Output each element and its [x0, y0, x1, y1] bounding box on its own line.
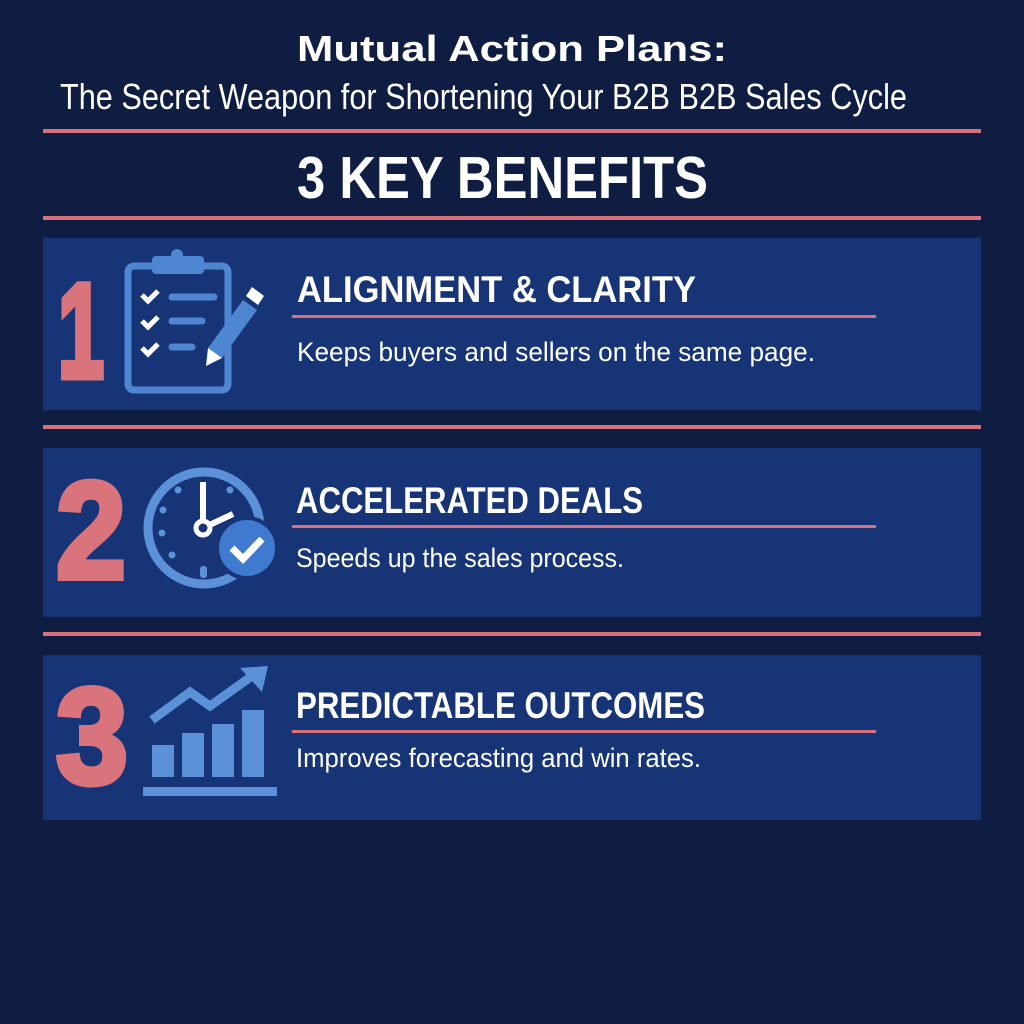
panel: accelerated deals: [43, 448, 981, 617]
title: Mutual Action Plans:: [297, 28, 727, 69]
icon: clock with check: [148, 472, 277, 584]
heading: PREDICTABLE OUTCOMES: [296, 685, 705, 726]
description: Keeps buyers and sellers on the same page.: [297, 337, 815, 367]
number 1: 1: [58, 257, 104, 406]
description: Improves forecasting and win rates.: [296, 743, 701, 773]
heading: ALIGNMENT & CLARITY: [297, 269, 696, 310]
description: Speeds up the sales process.: [296, 543, 624, 573]
panel: alignment & clarity: [43, 238, 981, 410]
number 2: 2: [56, 454, 126, 608]
number 3: 3: [56, 660, 128, 812]
panel: predictable outcomes: [43, 655, 981, 820]
heading: 3 key benefits: 3 KEY BENEFITS: [297, 145, 708, 211]
icon: bar chart with arrow: [143, 666, 277, 796]
heading: ACCELERATED DEALS: [296, 480, 643, 521]
icon: clipboard: [128, 249, 264, 390]
